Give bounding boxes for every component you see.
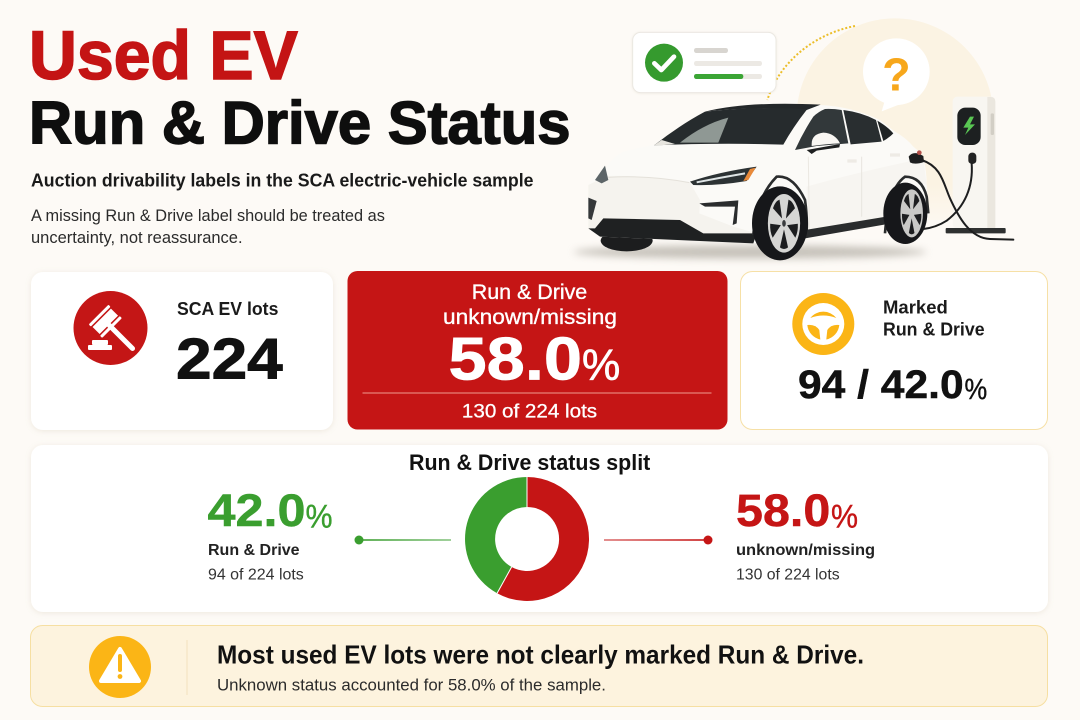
intro text: uncertainty, not reassurance.: [31, 229, 243, 247]
side sill: [805, 216, 892, 238]
icon: warning: [89, 636, 151, 698]
legend: run and drive: 94 of 224 lots: [208, 567, 304, 583]
label: [443, 281, 617, 329]
hood crease and bumper shading: [588, 176, 757, 233]
question bubble: [863, 38, 930, 111]
legend: run and drive: [208, 486, 333, 583]
label: unknown/missing: [443, 305, 617, 329]
intro text: [31, 207, 385, 247]
value: 58.0: [448, 324, 582, 393]
dotted connector: [767, 26, 855, 100]
front intake and splitter: [588, 218, 757, 243]
rear wheel arch: [885, 177, 928, 233]
legend: unknown or missing: 130 of 224 lots: [736, 567, 840, 583]
icon: gavel: [74, 291, 148, 365]
roof: [705, 104, 821, 112]
donut chart: [465, 477, 589, 601]
legend: unknown or missing: 58.0: [736, 486, 830, 536]
status card: [633, 32, 776, 93]
value: %: [582, 341, 620, 389]
mirror: [807, 133, 840, 154]
car body: [588, 104, 929, 243]
title: Used EV: [28, 18, 297, 95]
front wheel: [752, 186, 808, 260]
label: SCA EV lots: [177, 299, 278, 319]
label: Run & Drive: [883, 319, 985, 340]
windshield: [654, 108, 807, 145]
callout text: Unknown status accounted for 58.0% of the sample.: [217, 676, 606, 694]
rear wheel: [883, 183, 927, 244]
legend: unknown or missing: [736, 486, 875, 583]
legend: run and drive: 42.0: [208, 486, 306, 536]
intro text: A missing Run & Drive label should be treated as: [31, 207, 385, 225]
callout heading: Most used EV lots were not clearly marked Run & Drive.: [217, 641, 864, 670]
question bubble: ?: [882, 48, 911, 100]
label: Marked: [883, 296, 948, 317]
A-pillar highlight: [654, 140, 675, 145]
rear wheel back: [883, 183, 923, 243]
legend: unknown or missing: unknown/missing: [736, 541, 875, 559]
leader: red: [604, 536, 712, 544]
title: Run & Drive Status: [28, 90, 570, 157]
panel: marked run and drive: [740, 272, 1048, 430]
icon: steering wheel: [792, 293, 854, 355]
charging cable: [922, 160, 1013, 240]
panel: status split: [31, 445, 1048, 612]
callout banner: [30, 626, 1048, 706]
body side shading: [807, 158, 927, 230]
hero illustration: electric car and charger: [573, 18, 1013, 260]
value: %: [964, 372, 987, 405]
legend: run and drive: %: [306, 499, 333, 535]
legend: run and drive: Run & Drive: [208, 542, 300, 559]
charger: [946, 97, 1006, 233]
panel: unknown or missing: [348, 271, 728, 430]
value: 94 / 42.0: [798, 362, 964, 406]
front wheel arch: [753, 177, 807, 235]
headlights: [690, 167, 757, 185]
label: [883, 296, 985, 340]
value: 224: [176, 327, 283, 391]
panel: SCA EV lots: [31, 272, 333, 430]
label: Run & Drive: [472, 281, 587, 304]
car shadow: [573, 245, 927, 259]
title: [28, 18, 570, 157]
subtitle: Auction drivability labels in the SCA electric-vehicle sample: [31, 170, 533, 191]
charge plug: [909, 150, 924, 164]
count: 130 of 224 lots: [462, 401, 597, 422]
chart title: Run & Drive status split: [409, 450, 650, 475]
leader: green: [354, 536, 451, 544]
far front wheel: [601, 230, 653, 251]
background halo: [797, 18, 993, 220]
legend: unknown or missing: %: [831, 499, 858, 535]
side windows: [795, 109, 848, 150]
